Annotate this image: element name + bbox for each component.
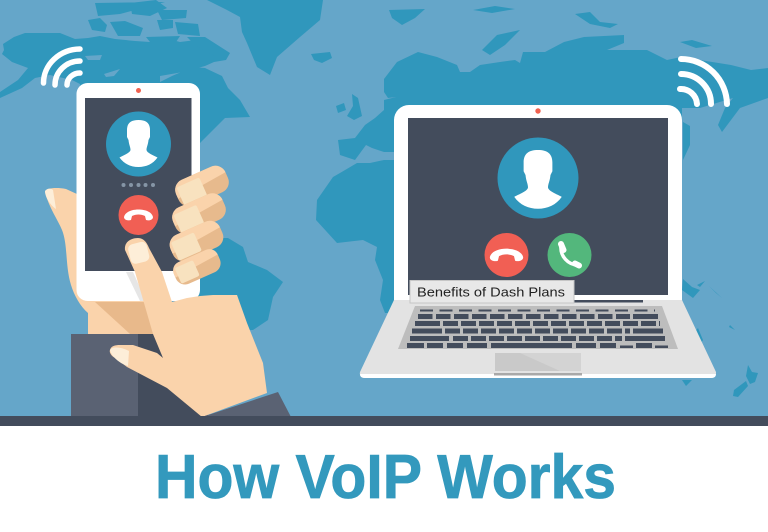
index fingernail: [127, 241, 150, 265]
laptop hang-up button: [484, 233, 528, 277]
world map: [0, 0, 768, 397]
phone camera: [136, 88, 141, 93]
laptop base: [360, 300, 716, 378]
phone body: [76, 83, 200, 301]
keyboard: [398, 306, 678, 349]
wifi signal left: [44, 49, 80, 85]
laptop: [360, 105, 716, 378]
finger 2: [169, 190, 229, 237]
pointing hand: [110, 238, 267, 417]
tooltip: Benefits of Dash Plans: Benefits of Dash Plans: [417, 284, 566, 300]
finger 3: [166, 217, 227, 265]
finger 1: [172, 162, 232, 210]
phone progress dots: [122, 183, 155, 187]
finger 4: [170, 246, 224, 288]
tooltip: Benefits of Dash Plans: [410, 280, 574, 303]
floor bar: [0, 416, 768, 426]
smartphone: [76, 83, 200, 301]
jacket cuff: [71, 334, 208, 417]
wifi signal right: [680, 59, 727, 104]
phone hang-up button: [118, 195, 158, 235]
laptop camera: [535, 108, 541, 114]
jacket sleeve: [202, 392, 291, 417]
title: How VoIP Works: [155, 443, 616, 512]
laptop lid: [394, 105, 682, 301]
laptop screen: [408, 118, 668, 295]
phone contact avatar: [106, 112, 171, 176]
laptop contact avatar: [498, 138, 578, 218]
four gripping fingers: [166, 162, 232, 288]
back hand holding phone: [45, 188, 170, 335]
thumbnail: [110, 347, 129, 366]
trackpad: [494, 353, 582, 376]
laptop answer button: [548, 233, 592, 277]
phone screen: [85, 98, 192, 271]
